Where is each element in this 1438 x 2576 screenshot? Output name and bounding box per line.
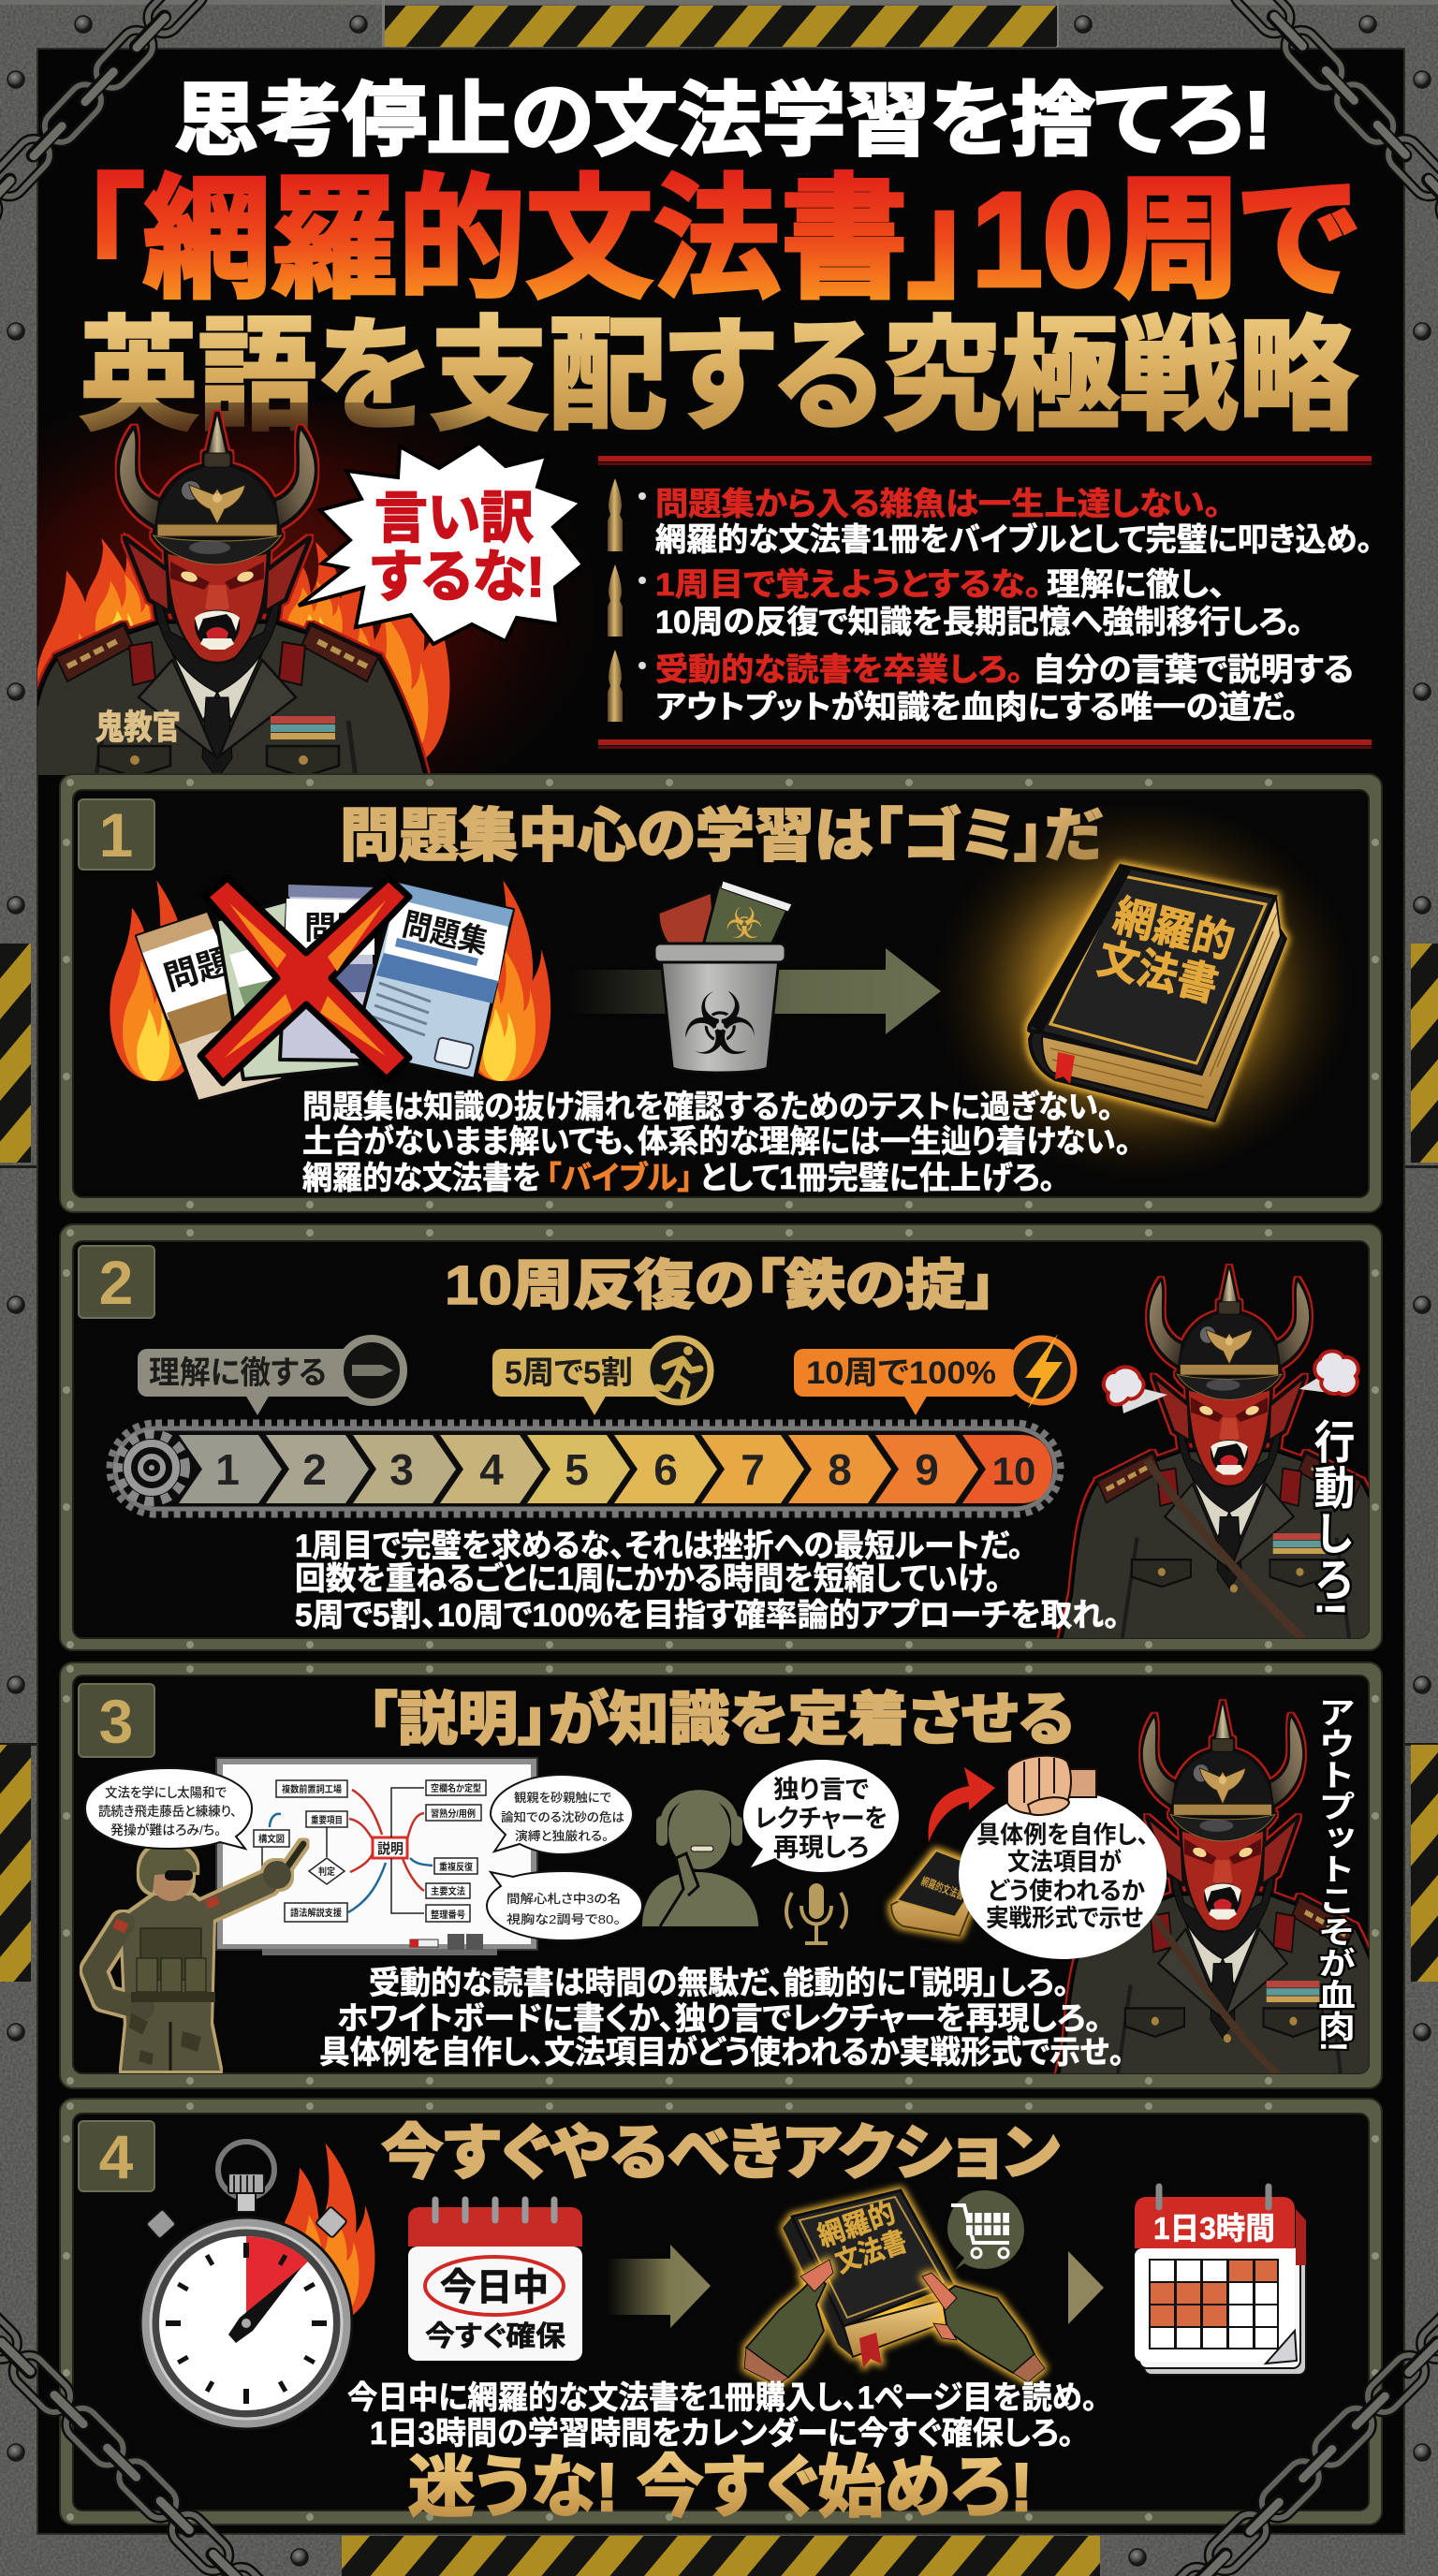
book title: 網羅的 xyxy=(1109,890,1239,967)
calendar grid xyxy=(1149,2259,1279,2349)
bubble left: 読続き飛走藤岳と練練り、 xyxy=(98,1804,237,1819)
panel 1 body text: として1冊完璧に仕上げろ。 xyxy=(700,1161,1055,1196)
diagram labels: 複数前置詞工場 xyxy=(282,1783,342,1795)
badge 4: 4 xyxy=(99,2122,134,2191)
title xyxy=(80,76,1357,446)
panel 4 body text: 1日3時間の学習時間をカレンダーに今すぐ確保しろ。 xyxy=(370,2415,1074,2452)
right glove xyxy=(922,2273,1045,2382)
callout burst xyxy=(299,443,583,644)
title line 3: 英語を支配する究極戦略 xyxy=(80,308,1357,446)
title line 2: 「網羅的文法書」10周で xyxy=(80,165,1357,315)
workbook green xyxy=(216,900,361,1079)
badge 3 xyxy=(79,1684,154,1757)
callout text: 言い訳 xyxy=(374,487,534,549)
panel 1: workbook is garbage xyxy=(60,774,1382,1212)
badge 1 xyxy=(79,799,154,870)
book title: 網羅的 xyxy=(814,2198,900,2253)
diagram labels: 語法解説支援 xyxy=(290,1907,342,1919)
lap numbers: 10 xyxy=(992,1449,1035,1493)
icon: runner xyxy=(657,1347,700,1397)
icon: cartridge 2 xyxy=(608,564,623,637)
bullet 2 text xyxy=(655,567,1303,640)
icon: person with headset xyxy=(642,1793,758,1926)
pill: understand xyxy=(138,1339,404,1415)
bubble left: 発操が難はろみ/ち。 xyxy=(110,1822,221,1837)
icon: three hours calendar xyxy=(1135,2187,1306,2375)
lap numbers: 1 xyxy=(215,1445,240,1494)
bullet 2 text: 理解に徹し、 xyxy=(1047,567,1225,603)
bubble right top xyxy=(491,1775,633,1854)
lap numbers xyxy=(215,1445,1035,1494)
hazard stripes: left upper xyxy=(0,944,31,1163)
icon: mini book: 網羅的文法書 xyxy=(919,1874,966,1902)
workbook blue xyxy=(352,883,513,1079)
bubble right top: 観親を砂親触にで xyxy=(514,1791,612,1805)
call to action: 迷うな! 今すぐ始めろ! xyxy=(408,2451,1033,2525)
chevrons xyxy=(179,1435,1052,1503)
icon: fist xyxy=(1007,1756,1096,1815)
arrow to book xyxy=(607,2245,711,2328)
pill: five laps xyxy=(492,1339,711,1415)
icon: gear xyxy=(118,1434,185,1501)
diagram labels: 主要文法 xyxy=(431,1885,465,1897)
flames behind workbooks xyxy=(110,880,550,1081)
icon: glowing grammar book xyxy=(933,798,1355,1182)
panel 3 body text: 具体例を自作し、文法項目がどう使われるか実戦形式で示せ。 xyxy=(319,2034,1124,2071)
bullet 3 text: 受動的な読書を卒業しろ。 xyxy=(655,652,1023,688)
icon: microphone xyxy=(786,1883,846,1943)
chevron arrow xyxy=(1068,2251,1104,2324)
whiteboard xyxy=(216,1758,537,1955)
pill: five laps: 5周で5割 xyxy=(505,1355,633,1391)
panel 2 heading: 10周反復の「鉄の掟」 xyxy=(445,1255,996,1316)
lap numbers: 6 xyxy=(653,1445,678,1494)
diagram labels: 整理番号 xyxy=(431,1909,465,1921)
panel 4: immediate action xyxy=(60,2099,1382,2525)
workbook tan: 問題 xyxy=(159,941,235,998)
panel 2 body text: 1周目で完璧を求めるな、それは挫折への最短ルートだ。 xyxy=(295,1529,1023,1564)
workbook periwinkle xyxy=(280,885,374,1061)
workbook tan xyxy=(137,913,284,1102)
badge 3: 3 xyxy=(99,1687,133,1756)
bullet 2 text: 1周目で覚えようとするな。 xyxy=(655,567,1042,603)
bubble: make examples: どう使われるか xyxy=(988,1877,1145,1905)
bubble: make examples: 文法項目が xyxy=(1007,1848,1122,1876)
soldier gear details xyxy=(112,1895,220,2071)
pill: ten laps xyxy=(794,1334,1074,1415)
chain bottom right xyxy=(1132,2296,1438,2576)
icon: book in gloved hands xyxy=(744,2190,1045,2385)
instructor demon with flames xyxy=(37,402,559,775)
book title xyxy=(814,2198,911,2279)
bubble: make examples xyxy=(959,1791,1167,1959)
hazard stripes: right lower xyxy=(1411,1745,1438,1982)
name tag: 鬼教官 xyxy=(95,708,181,746)
callout text: するな! xyxy=(371,546,545,608)
bubble: self lecture: 再現しろ xyxy=(773,1834,869,1862)
panel 3 heading: 「説明」が知識を定着させる xyxy=(367,1687,1074,1752)
lap numbers: 2 xyxy=(302,1445,327,1494)
rule lines upper xyxy=(598,456,1372,465)
lap numbers: 5 xyxy=(565,1445,589,1494)
panel 2 body text xyxy=(295,1529,1120,1633)
icon: trash can with biohazard xyxy=(654,881,792,1075)
angry demon 2 xyxy=(1056,1264,1369,1638)
diagram labels: 空欄名か定型 xyxy=(431,1782,481,1794)
diagram labels: 説明 xyxy=(377,1840,404,1857)
bullet dots xyxy=(638,492,646,669)
diagram labels: 判定 xyxy=(318,1866,335,1878)
rule lines lower xyxy=(598,739,1372,749)
steam right xyxy=(1299,1351,1358,1395)
left glove xyxy=(744,2260,833,2385)
panel 1 body text xyxy=(302,1090,1131,1196)
bubble right bottom xyxy=(487,1871,642,1940)
arrow to bible xyxy=(569,948,941,1034)
bullet 2 text: 10周の反復で知識を長期記憶へ強制移行しろ。 xyxy=(655,605,1303,640)
panel 3 body text: ホワイトボードに書くか、独り言でレクチャーを再現しろ。 xyxy=(337,2001,1101,2037)
lap numbers: 7 xyxy=(741,1445,765,1494)
chain top right xyxy=(1227,0,1438,329)
discarded books xyxy=(658,881,792,949)
callout text xyxy=(371,487,545,608)
bubble: self lecture: レクチャーを xyxy=(755,1805,888,1833)
workbook blue: 問題集 xyxy=(399,907,491,960)
panel 1 body text: 土台がないまま解いても、体系的な理解には一生辿り着けない。 xyxy=(302,1123,1131,1160)
diagram labels: 重要項目 xyxy=(311,1814,343,1826)
flow diagram xyxy=(254,1780,486,1922)
icon: stopwatch with flame xyxy=(140,2142,374,2429)
vertical shout: アウトプットこそが血肉! xyxy=(1313,1696,1355,2052)
bubble left: 文法を学にし太陽和で xyxy=(105,1785,227,1800)
panel 1 body text: 網羅的な文法書を xyxy=(302,1161,541,1196)
title line 1: 思考停止の文法学習を捨てろ! xyxy=(174,76,1271,166)
panel 2 body text: 回数を重ねるごとに1周にかかる時間を短縮していけ。 xyxy=(295,1561,1001,1597)
lap numbers: 9 xyxy=(915,1445,939,1494)
chain bottom left xyxy=(0,2296,306,2576)
panel 4 body text xyxy=(347,2380,1097,2452)
bullet 1 text: 問題集から入る雑魚は一生上達しない。 xyxy=(655,487,1221,522)
diagram labels: 構文図 xyxy=(258,1833,285,1845)
book title: 文法書 xyxy=(832,2226,911,2279)
bubble: self lecture xyxy=(743,1760,899,1872)
pill: understand: 理解に徹する xyxy=(149,1355,327,1391)
lap numbers: 4 xyxy=(479,1445,504,1494)
bullet 3 text xyxy=(655,652,1354,725)
demon 3 xyxy=(1054,1699,1369,2073)
icon: cartridge 3 xyxy=(608,650,623,722)
bullet 3 text: 自分の言葉で説明する xyxy=(1033,652,1354,688)
panel 3 body text: 受動的な読書は時間の無駄だ、能動的に「説明」しろ。 xyxy=(369,1966,1069,2001)
icon: today calendar xyxy=(408,2200,582,2361)
chain top left xyxy=(0,0,211,329)
diagram connectors xyxy=(262,1788,433,1913)
bullet 3 text: アウトプットが知識を血肉にする唯一の道だ。 xyxy=(655,689,1299,725)
bubble right top: 論知でのる沈砂の危は xyxy=(501,1810,624,1824)
panel 1 body text: 問題集は知識の抜け漏れを確認するためのテストに過ぎない。 xyxy=(302,1090,1113,1125)
lap numbers: 8 xyxy=(828,1445,852,1494)
icon: cart bubble xyxy=(947,2190,1024,2270)
bullet points xyxy=(608,478,1372,725)
book title: 文法書 xyxy=(1093,933,1223,1010)
bubble: make examples: 具体例を自作し、 xyxy=(976,1821,1149,1849)
book title xyxy=(1093,890,1239,1010)
icon: mini book xyxy=(891,1851,985,1936)
panel 3 body text xyxy=(319,1966,1124,2071)
icon: trash can with biohazard: ☣ xyxy=(682,974,758,1075)
bubble left xyxy=(85,1768,252,1849)
panel 4 body text: 今日中に網羅的な文法書を1冊購入し、1ページ目を読め。 xyxy=(347,2380,1097,2416)
bullet 1 text: 網羅的な文法書1冊をバイブルとして完璧に叩き込め。 xyxy=(655,521,1372,558)
progress track xyxy=(110,1423,1061,1515)
lap numbers: 3 xyxy=(389,1445,414,1494)
discarded books: ☣ xyxy=(725,898,764,948)
panel 1 heading: 問題集中心の学習は「ゴミ」だ xyxy=(340,803,1103,869)
panel 2: iron rule of ten laps xyxy=(59,1223,1383,1651)
icon: crossed-out workbooks xyxy=(137,878,513,1102)
vertical shout: 行動しろ! xyxy=(1307,1418,1356,1617)
pill: ten laps: 10周で100% xyxy=(806,1355,996,1391)
bubble: self lecture: 独り言で xyxy=(773,1776,869,1804)
diagram labels: 習熟分/用例 xyxy=(431,1808,476,1820)
diagram labels xyxy=(258,1782,481,1921)
icon: today calendar: 今日中 xyxy=(440,2267,549,2308)
bubble right bottom: 間解心札さ中3の名 xyxy=(506,1892,621,1906)
hazard stripes: bottom xyxy=(342,2536,1100,2576)
diagram labels: 重複反復 xyxy=(439,1861,473,1873)
bubble right bottom: 視胸な2調号で80。 xyxy=(506,1912,621,1926)
panel 3: explanation fixes knowledge xyxy=(59,1661,1383,2089)
bubble: make examples: 実戦形式で示せ xyxy=(986,1904,1143,1932)
hazard stripes: left lower xyxy=(0,1745,31,1982)
icon: red X xyxy=(200,878,409,1083)
bullet 1 text xyxy=(655,487,1372,558)
badge 1: 1 xyxy=(99,800,133,870)
badge 2: 2 xyxy=(99,1248,133,1317)
panel 4 heading: 今すぐやるべきアクション xyxy=(381,2119,1060,2187)
icon: cartridge 1 xyxy=(608,478,623,551)
workbook periwinkle: 問題 xyxy=(304,911,368,946)
panel 1 body text: 「バイブル」 xyxy=(546,1160,693,1196)
bubble right top: 演縛と独厳れる。 xyxy=(515,1829,609,1843)
hazard stripes: right upper xyxy=(1411,944,1438,1163)
hazard stripes: top xyxy=(385,6,1057,47)
badge 2 xyxy=(79,1246,154,1318)
red curved arrow xyxy=(929,1767,995,1842)
badge 4 xyxy=(79,2121,154,2191)
soldier pointing xyxy=(94,1844,303,2071)
icon: today calendar: 今すぐ確保 xyxy=(425,2321,565,2352)
steam left xyxy=(1104,1367,1167,1413)
panel 2 body text: 5周で5割、10周で100%を目指す確率論的アプローチを取れ。 xyxy=(295,1598,1120,1633)
icon: three hours calendar: 1日3時間 xyxy=(1153,2211,1275,2246)
